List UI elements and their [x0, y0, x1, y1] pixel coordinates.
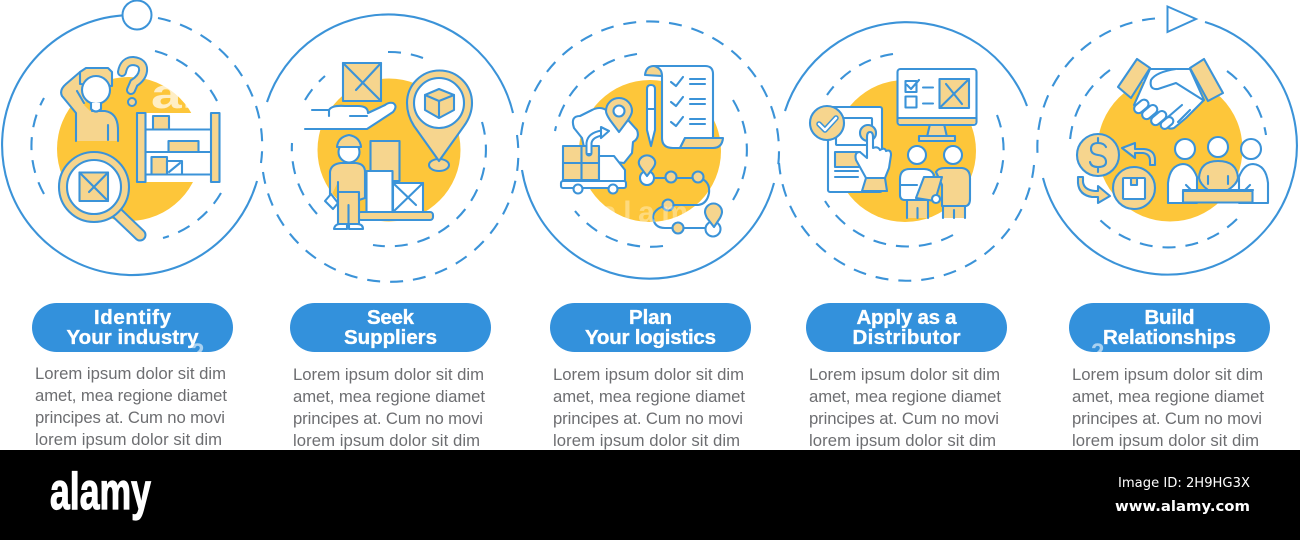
footer band: [0, 450, 1300, 540]
icon: route map: [639, 155, 722, 236]
ring 3: [521, 21, 779, 279]
body text 1: lorem ipsum dolor sit dim: [35, 430, 222, 449]
step 3 label: Your logistics: [585, 326, 716, 349]
ring 2: [263, 14, 518, 282]
icon: pen: [647, 85, 655, 146]
icon: crate on hand: [305, 63, 396, 129]
body text 3: principes at. Cum no movi: [553, 409, 743, 428]
alamy logo: alamy: [50, 463, 151, 521]
body text 3: amet, mea regione diamet: [553, 387, 745, 406]
body text 3: [553, 365, 745, 450]
step 1 label: Identify: [94, 306, 172, 329]
start marker circle: [122, 0, 152, 30]
step 2 label: Suppliers: [344, 326, 437, 349]
watermark fragment: alam: [600, 196, 688, 229]
step 5 label: Build: [1144, 306, 1194, 329]
watermark fragment: al: [151, 70, 197, 117]
body text 3: lorem ipsum dolor sit dim: [553, 431, 740, 450]
icon: exchange money and goods: [1077, 134, 1155, 209]
body text 1: [35, 364, 227, 449]
body text 5: lorem ipsum dolor sit dim: [1072, 431, 1259, 450]
icon: location pin with box: [407, 70, 472, 171]
panel: seek suppliers: [263, 14, 518, 282]
step 5 label: [1069, 303, 1270, 352]
body text 4: Lorem ipsum dolor sit dim: [809, 365, 1000, 384]
body text 4: amet, mea regione diamet: [809, 387, 1001, 406]
body text 5: [1072, 365, 1264, 450]
step 4 label: Apply as a: [856, 306, 957, 329]
body text 2: principes at. Cum no movi: [293, 409, 483, 428]
body text 2: lorem ipsum dolor sit dim: [293, 431, 480, 450]
panel: build relationships: [1037, 6, 1297, 275]
body text 5: principes at. Cum no movi: [1072, 409, 1262, 428]
step 5 label: 2: [1091, 339, 1104, 366]
yellow disc 3: [579, 80, 721, 222]
step 4 label: Distributor: [852, 326, 961, 349]
icon: computer monitor: [898, 69, 976, 141]
website: www.alamy.com: [1115, 499, 1250, 515]
body text 1: principes at. Cum no movi: [35, 408, 225, 427]
ring 1: [2, 15, 262, 275]
yellow disc 2: [318, 78, 460, 222]
panel: identify your industry: [2, 0, 262, 275]
ring 5: [1037, 18, 1297, 275]
step 4 label: [806, 303, 1007, 352]
panel: plan your logistics: [521, 21, 779, 279]
body text 5: Lorem ipsum dolor sit dim: [1072, 365, 1263, 384]
icon: meeting people: [1168, 137, 1268, 203]
body text 2: [293, 365, 485, 450]
body text 1: Lorem ipsum dolor sit dim: [35, 364, 226, 383]
body text 4: [809, 365, 1001, 450]
yellow disc 4: [834, 80, 976, 222]
image id: Image ID: 2H9HG3X: [1118, 475, 1250, 491]
step 3 label: [550, 303, 751, 352]
step 1 label: [32, 303, 233, 352]
body text 4: principes at. Cum no movi: [809, 409, 999, 428]
icon: checklist scroll: [645, 66, 723, 148]
step 2 label: [290, 303, 491, 352]
icon: warehouse shelf: [137, 113, 220, 182]
icon: worker with boxes: [325, 135, 433, 229]
body text 2: amet, mea regione diamet: [293, 387, 485, 406]
icon: question mark: [122, 61, 143, 106]
step 1 label: Your industry: [66, 326, 199, 349]
icon: two colleagues: [900, 146, 970, 218]
body text 2: Lorem ipsum dolor sit dim: [293, 365, 484, 384]
step 2 label: Seek: [367, 306, 415, 329]
body text 3: Lorem ipsum dolor sit dim: [553, 365, 744, 384]
body text 4: lorem ipsum dolor sit dim: [809, 431, 996, 450]
yellow disc 5: [1098, 76, 1242, 222]
icon: tablet with hand: [810, 106, 891, 192]
step 1 label: 2: [191, 339, 204, 366]
step 5 label: Relationships: [1103, 326, 1236, 349]
icon: handshake: [1118, 59, 1223, 131]
panel: apply as a distributor: [779, 22, 1034, 281]
icon: confused person: [61, 68, 118, 141]
body text 5: amet, mea regione diamet: [1072, 387, 1264, 406]
icon: map with pin: [573, 108, 638, 163]
yellow disc 1: [57, 77, 201, 221]
end marker triangle: [1168, 6, 1196, 32]
icon: map pin: [606, 98, 632, 132]
step 3 label: Plan: [629, 306, 672, 329]
icon: delivery truck: [561, 127, 626, 194]
icon: magnifier with crate: [59, 152, 140, 235]
body text 1: amet, mea regione diamet: [35, 386, 227, 405]
ring 4: [779, 22, 1034, 281]
